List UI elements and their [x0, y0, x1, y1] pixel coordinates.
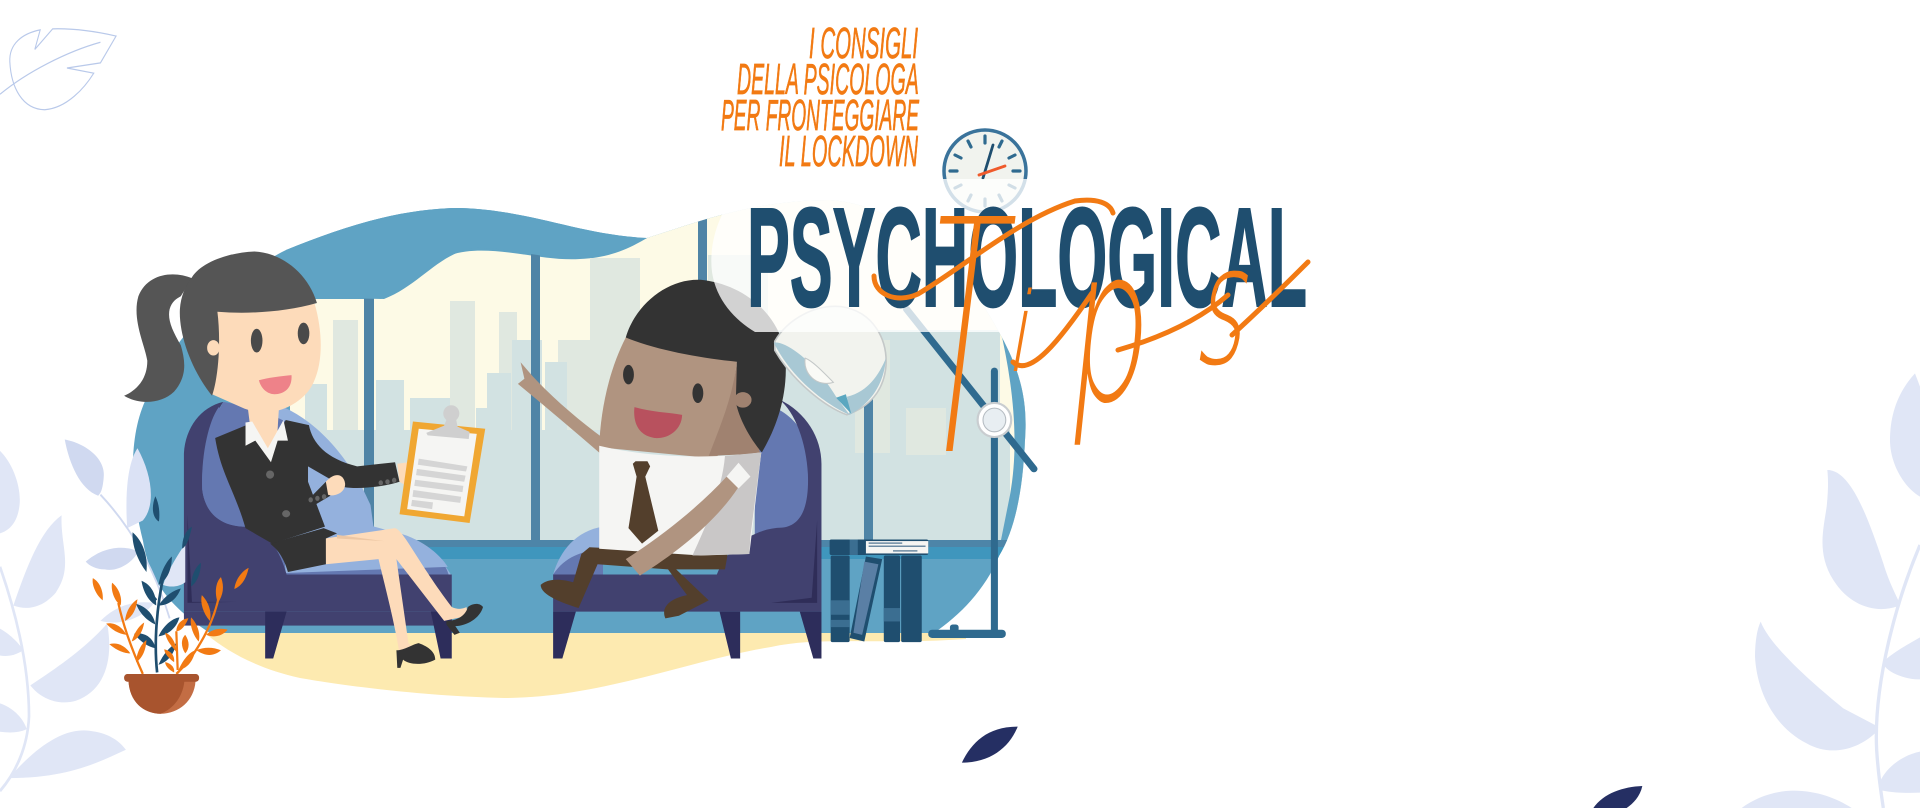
text: PER FRONTEGGIARE: [721, 91, 919, 140]
left armchair: [184, 402, 452, 659]
woman psychologist: [124, 251, 485, 668]
main hair: [180, 251, 317, 396]
text: DELLA PSICOLOGA: [737, 55, 918, 104]
books: [830, 540, 928, 642]
faint plant right: [1742, 373, 1920, 808]
subtitle: I CONSIGLI: [809, 19, 918, 68]
letter T: T: [899, 144, 1027, 529]
window with skyline: [290, 198, 1040, 559]
clipboard: [400, 405, 485, 523]
ear: [734, 392, 752, 408]
swash on the T: [874, 200, 1113, 298]
script word Tips: [872, 198, 1310, 451]
hair: [626, 280, 786, 452]
faint plant left: [0, 451, 126, 791]
eyes: [623, 365, 634, 384]
pot: [129, 681, 196, 714]
ear: [207, 340, 220, 356]
right window edge: [1001, 338, 1026, 545]
eyes: [251, 329, 262, 352]
orange branches: [93, 568, 249, 674]
shoes: [446, 604, 483, 635]
dark leaf bottom centre: [962, 727, 1018, 763]
window frame: [364, 218, 1008, 559]
connecting swash from i to p: [1013, 293, 1092, 366]
mouth: [634, 407, 682, 438]
floor blob: [205, 633, 966, 698]
tie: [628, 461, 658, 544]
head: [212, 304, 321, 412]
man patient: [518, 280, 786, 618]
raised arm: [518, 362, 603, 453]
jacket: [215, 420, 400, 544]
therapy room illustration: [124, 179, 1040, 698]
clock fade: [940, 179, 1030, 216]
letter s: s: [1185, 211, 1269, 403]
letter p: p: [1060, 200, 1165, 451]
lower arm: [626, 477, 739, 576]
white fade overlay behind title: [711, 179, 1010, 332]
pale sprig behind plant: [65, 440, 185, 623]
cuff: [727, 463, 750, 489]
wall clock: [940, 130, 1030, 216]
neck: [248, 407, 279, 453]
dark leaf bottom right: [1593, 786, 1642, 808]
buttons: [266, 470, 396, 517]
floor lamp: [774, 306, 1034, 638]
shirt: [599, 446, 761, 555]
letter i: i: [1000, 269, 1044, 397]
ponytail: [124, 274, 192, 402]
decorative outline leaf top left: [0, 29, 116, 110]
right armchair: [553, 399, 821, 659]
collar: [246, 420, 288, 462]
legs: [541, 547, 728, 618]
wave curtain: [286, 208, 647, 299]
head: [599, 338, 737, 459]
swash tail: [1118, 262, 1308, 350]
skirt: [270, 528, 337, 572]
dark teal branches: [133, 496, 201, 672]
mouth: [259, 375, 292, 394]
text: IL LOCKDOWN: [779, 127, 918, 176]
potted plant: [65, 440, 249, 714]
blue room blob: [133, 200, 1026, 633]
legs: [325, 528, 468, 654]
